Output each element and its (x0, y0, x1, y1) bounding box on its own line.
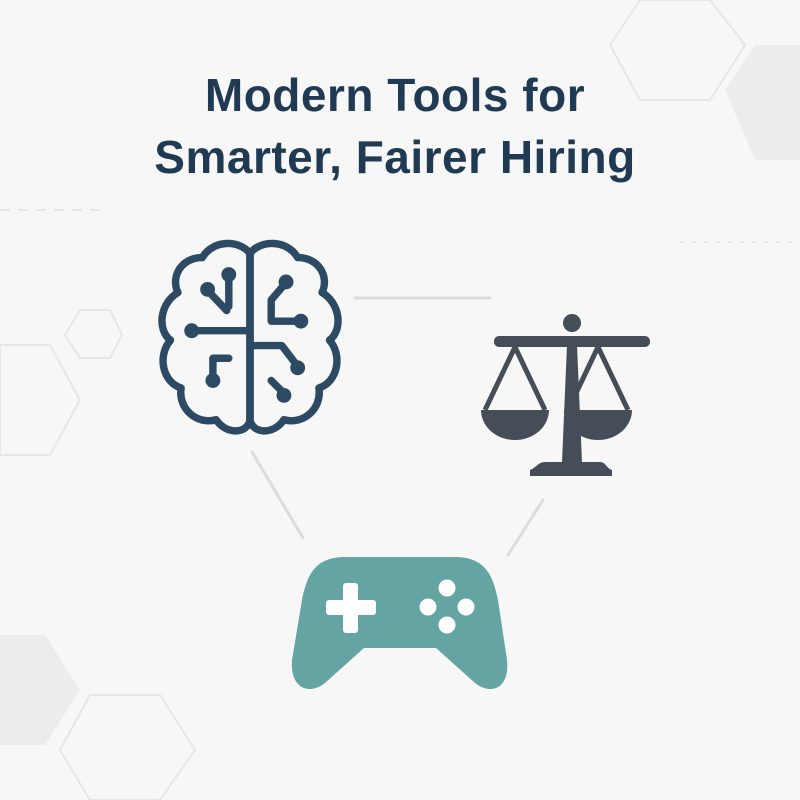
title: Smarter, Fairer Hiring (154, 131, 636, 183)
title (154, 69, 636, 183)
title: Modern Tools for (205, 69, 585, 121)
connector lines (252, 298, 543, 555)
